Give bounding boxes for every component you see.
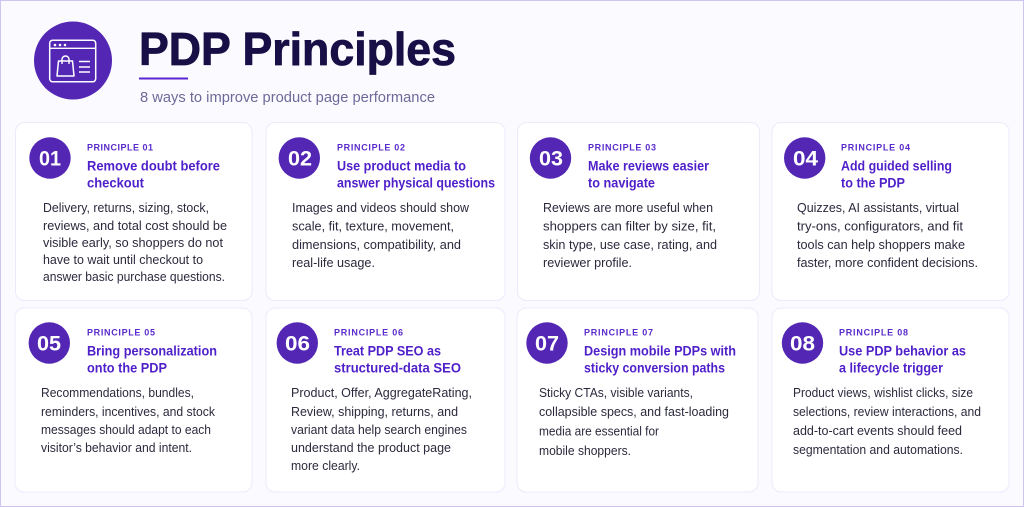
panel: principle 04: PRINCIPLE 04 <box>841 142 910 152</box>
panel: principle 01: visible early, so shoppers do not <box>43 235 223 250</box>
panel: principle 01: answer basic purchase questions. <box>43 269 225 284</box>
panel: principle 04: Add guided selling <box>841 158 952 174</box>
panel: principle 04: faster, more confident decisions. <box>797 255 978 270</box>
panel: principle 08: Use PDP behavior as <box>839 344 966 358</box>
panel: principle 04: try-ons, configurators, and fit <box>797 218 963 234</box>
panel: principle 05: Recommendations, bundles, <box>41 385 194 400</box>
header icon: shopping bag in browser window <box>34 22 112 100</box>
panel: principle 04 <box>772 122 1009 300</box>
panel: principle 07: collapsible specs, and fast-loading <box>539 404 729 419</box>
panel: principle 06: PRINCIPLE 06 <box>334 328 403 338</box>
panel: principle 06: understand the product page <box>291 440 451 455</box>
panel: principle 08: Product views, wishlist clicks, size <box>793 385 973 400</box>
panel: principle 02: Images and videos should show <box>292 200 470 215</box>
panel: principle 08: add-to-cart events should feed <box>793 423 962 438</box>
panel: principle 05 <box>15 308 252 492</box>
panel: principle 01: Remove doubt before <box>87 158 220 174</box>
panel: principle 05: messages should adapt to each <box>41 422 211 437</box>
panel: principle 08: selections, review interactions, and <box>793 404 981 419</box>
panel: principle 03: to navigate <box>588 176 655 190</box>
panel: principle 06: more clearly. <box>291 458 360 473</box>
panel: principle 06: Treat PDP SEO as <box>334 344 441 358</box>
panel: principle 06: Review, shipping, returns, and <box>291 404 458 419</box>
panel: principle 07: Design mobile PDPs with <box>584 344 736 358</box>
panel: principle 01: reviews, and total cost should be <box>43 218 227 233</box>
panel: principle 03: Reviews are more useful when <box>543 200 713 215</box>
panel: principle 06: 06 <box>285 332 310 356</box>
panel: principle 06 <box>266 308 505 492</box>
panel: principle 07: media are essential for <box>539 424 660 438</box>
panel: principle 05: PRINCIPLE 05 <box>87 328 155 338</box>
panel: principle 06: Product, Offer, AggregateRating, <box>291 385 472 400</box>
panel: principle 07: sticky conversion paths <box>584 360 725 376</box>
panel: principle 04: Quizzes, AI assistants, virtual <box>797 200 959 215</box>
panel: principle 02: real-life usage. <box>292 255 375 270</box>
panel: principle 07 <box>517 308 758 492</box>
panel: principle 03: skin type, use case, rating, and <box>543 237 717 252</box>
panel: principle 02: 02 <box>288 148 312 170</box>
panel: principle 02 <box>266 122 505 300</box>
title: PDP Principles <box>139 23 456 75</box>
panel: principle 03: Make reviews easier <box>588 158 710 174</box>
panel: principle 01 <box>16 122 252 300</box>
panel: principle 03: shoppers can filter by size, fit, <box>543 218 716 234</box>
panel: principle 02: answer physical questions <box>337 176 495 190</box>
panel: principle 08: segmentation and automations. <box>793 442 963 457</box>
panel: principle 02: scale, fit, texture, movement, <box>292 218 454 234</box>
panel: principle 02: dimensions, compatibility, and <box>292 237 461 252</box>
panel: principle 02: PRINCIPLE 02 <box>337 142 405 152</box>
panel: principle 08 <box>772 308 1009 492</box>
panel: principle 05: onto the PDP <box>87 360 167 376</box>
panel: principle 03: reviewer profile. <box>543 255 632 270</box>
panel: principle 03: 03 <box>539 148 563 170</box>
panel: principle 01: have to wait until checkout to <box>43 252 203 267</box>
panel: principle 01: 01 <box>39 148 61 170</box>
panel: principle 01: checkout <box>87 176 144 190</box>
panel: principle 02: Use product media to <box>337 158 466 174</box>
title underline <box>139 78 188 80</box>
panel: principle 03 <box>518 122 760 300</box>
panel: principle 04: 04 <box>793 148 818 170</box>
panel: principle 08: 08 <box>790 332 815 356</box>
panel: principle 01: Delivery, returns, sizing, stock, <box>43 200 209 215</box>
panel: principle 05: reminders, incentives, and stock <box>41 404 215 419</box>
panel: principle 07: mobile shoppers. <box>539 443 631 458</box>
panel: principle 08: PRINCIPLE 08 <box>839 328 908 338</box>
panel: principle 07: Sticky CTAs, visible variants, <box>539 385 693 400</box>
panel: principle 05: 05 <box>37 332 61 356</box>
panel: principle 06: structured-data SEO <box>334 360 461 376</box>
panel: principle 07: 07 <box>535 332 559 356</box>
panel: principle 03: PRINCIPLE 03 <box>588 142 656 152</box>
panel: principle 08: a lifecycle trigger <box>839 360 944 376</box>
panel: principle 05: visitor’s behavior and intent. <box>41 440 192 455</box>
panel: principle 05: Bring personalization <box>87 344 217 358</box>
subtitle: 8 ways to improve product page performance <box>140 89 435 106</box>
panel: principle 01: PRINCIPLE 01 <box>87 142 153 152</box>
panel: principle 04: tools can help shoppers make <box>797 237 965 252</box>
panel: principle 07: PRINCIPLE 07 <box>584 328 653 338</box>
panel: principle 04: to the PDP <box>841 176 905 190</box>
panel: principle 06: variant data help search engines <box>291 422 467 437</box>
